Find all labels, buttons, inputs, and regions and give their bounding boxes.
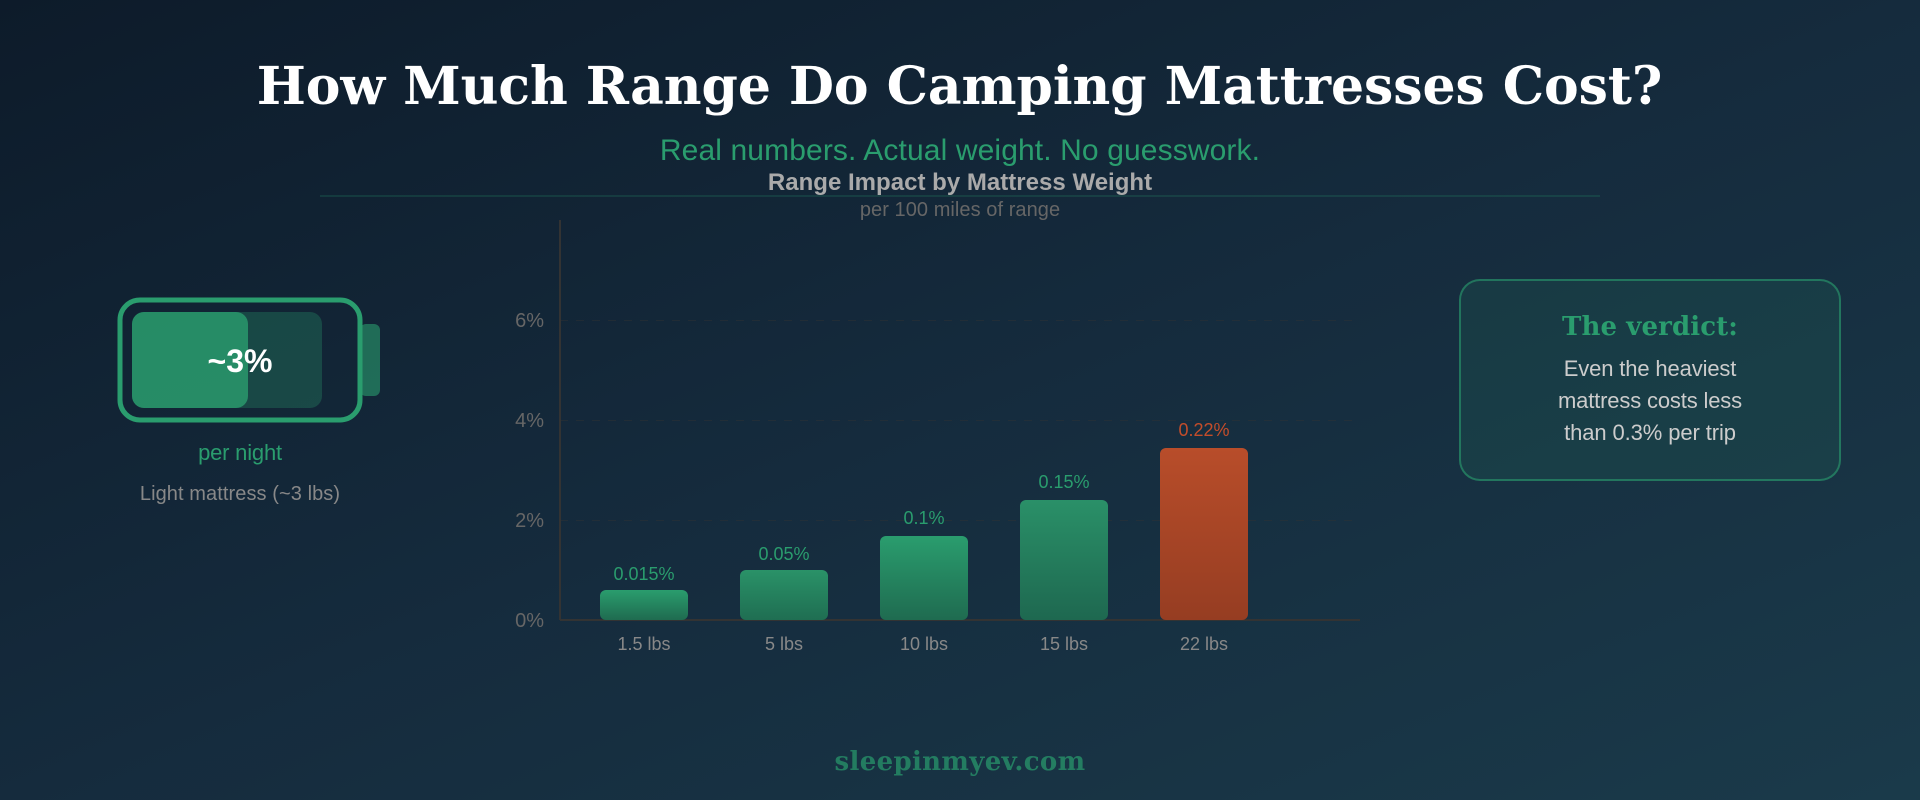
bar: 10 lbs: 0.1% [903,508,945,528]
bar: 1.5 lbs: 0.015% [613,564,675,584]
bar: 5 lbs: 0.05% [758,544,810,564]
bar chart [515,220,1360,654]
title: How Much Range Do Camping Mattresses Cost? [257,56,1662,117]
battery panel [118,298,380,505]
y axis labels: 6% [515,310,544,332]
bar: 5 lbs [740,544,828,654]
icon: battery [118,298,380,422]
footer: sleepinmyev.com [835,747,1085,777]
bar: 1.5 lbs [600,564,688,654]
callout: verdict [1459,279,1841,481]
y axis labels: 4% [515,410,544,432]
verdict text: than 0.3% per trip [1564,420,1736,445]
battery caption: per night: per night [198,440,282,465]
bar: 22 lbs: 0.22% [1178,420,1230,440]
bar: 10 lbs [880,508,968,654]
battery note: Light mattress (~3 lbs) [140,483,340,505]
bar: 15 lbs: 15 lbs [1040,634,1088,654]
subtitle: Real numbers. Actual weight. No guesswork. [660,134,1260,167]
battery value: ~3% [208,343,272,379]
y axis labels: 0% [515,610,544,632]
verdict text: Even the heaviest [1564,356,1736,381]
y axis labels: 2% [515,510,544,532]
bar: 22 lbs [1160,420,1248,654]
verdict heading: The verdict: [1562,312,1738,342]
chart heading: Range Impact by Mattress Weight [768,169,1152,196]
chart subheading: per 100 miles of range [860,199,1060,221]
bar: 10 lbs: 10 lbs [900,634,948,654]
y axis labels [515,310,544,632]
bar: 1.5 lbs: 1.5 lbs [617,634,671,654]
bar: 15 lbs: 0.15% [1038,472,1090,492]
bar: 5 lbs: 5 lbs [765,634,803,654]
bar: 22 lbs: 22 lbs [1180,634,1228,654]
bar: 15 lbs [1020,472,1108,654]
verdict text: mattress costs less [1558,388,1742,413]
verdict text [1558,356,1742,445]
